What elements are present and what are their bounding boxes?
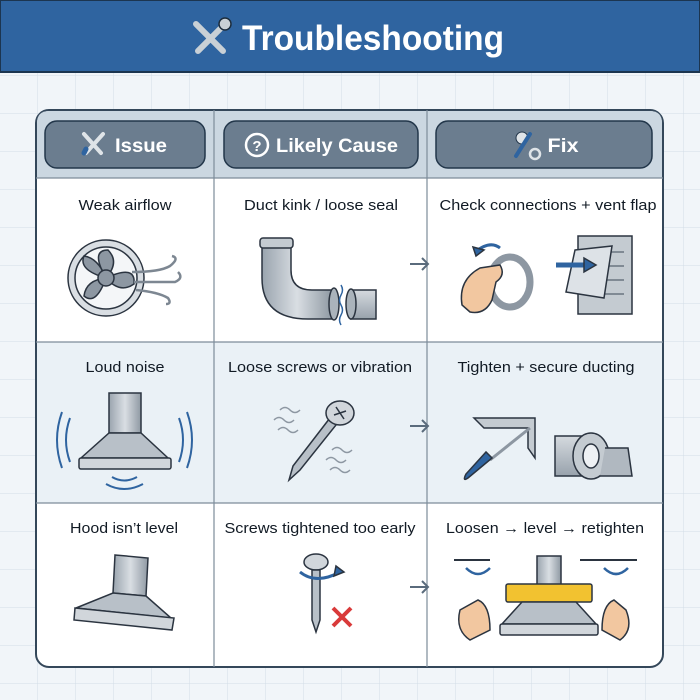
row1 fix: [440, 197, 656, 314]
row1 fix: Check connections + vent flap: [440, 197, 656, 214]
header: Fix: Fix: [548, 136, 579, 157]
row1 issue: Weak airflow: [68, 197, 180, 316]
icon: vibrating screw: [274, 401, 354, 480]
header: Issue: [45, 121, 205, 168]
icon: hose clamp with hand: [461, 245, 530, 312]
icon: elbow duct: [260, 238, 376, 325]
title text: Troubleshooting: [242, 19, 504, 58]
row3 fix: Loosen → level → retighten: [446, 520, 644, 537]
icon: bracket and screwdriver: [464, 418, 535, 479]
row2 fix: Tighten + secure ducting: [458, 359, 634, 376]
icon: tilted hood: [74, 555, 174, 630]
row2 cause: Loose screws or vibration: [228, 359, 412, 376]
row2 cause: [228, 359, 412, 480]
header: Likely Cause: Likely Cause: [276, 136, 398, 157]
row3 issue: Hood isn’t level: [70, 520, 178, 537]
icon: leveling hood with hands: [454, 556, 637, 640]
row1 cause: Duct kink: Duct kink / loose seal: [244, 197, 398, 214]
icon: fan: [68, 240, 180, 316]
row2 fix: [458, 359, 634, 479]
row3 fix: [446, 520, 644, 640]
icon: duct tape: [555, 433, 632, 479]
row1 issue: Weak airflow: Weak airflow: [78, 197, 172, 214]
row2 issue: Loud noise: Loud noise: [86, 359, 164, 376]
icon: noisy hood: [57, 393, 192, 489]
header: Likely Cause: [224, 121, 418, 168]
row1 cause: Duct kink: [244, 197, 398, 325]
table panel: [36, 110, 663, 667]
row3 issue: [70, 520, 178, 630]
icon: crossed tools: [196, 18, 231, 51]
header: Issue: Issue: [115, 136, 167, 157]
row2 issue: Loud noise: [57, 359, 192, 489]
arrow row3: [410, 581, 428, 593]
arrow row2: [410, 420, 428, 432]
icon: vent flap: [556, 236, 632, 314]
arrow row1: [410, 258, 428, 270]
header: Fix: [436, 121, 652, 168]
icon: screw with x: [300, 554, 351, 632]
title bar: [0, 0, 700, 72]
header: Likely Cause: ?: [252, 138, 262, 155]
row3 cause: Screws tightened too early: [224, 520, 416, 537]
row3 cause: [224, 520, 416, 632]
